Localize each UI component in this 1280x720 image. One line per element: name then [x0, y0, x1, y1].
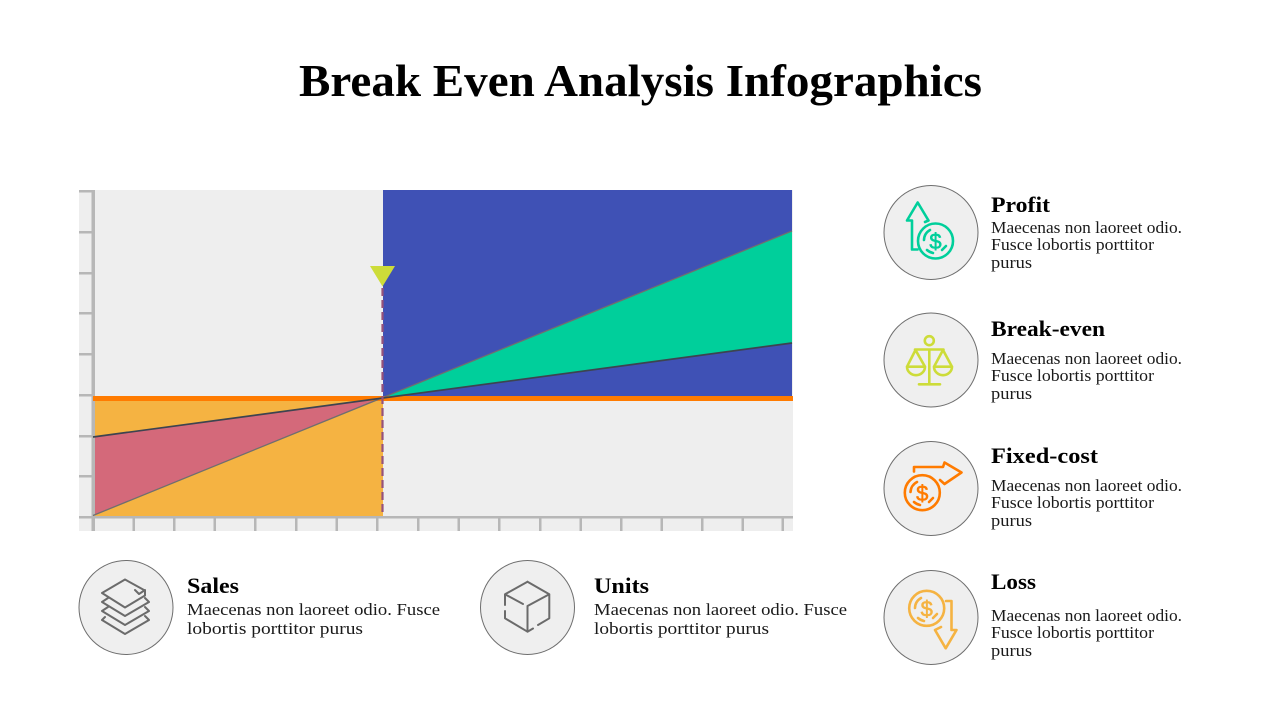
units text: Maecenas non laoreet odio. Fusce [594, 600, 847, 619]
icon: right arrow with coin [905, 462, 962, 510]
loss text: Fusce lobortis porttitor [991, 623, 1155, 642]
item: loss [884, 569, 1182, 664]
icon: scales [907, 336, 952, 384]
profit wedge [383, 231, 792, 398]
axis grid ticks [79, 190, 793, 531]
loss text: Loss [991, 569, 1036, 594]
break-even text [991, 316, 1182, 403]
loss text: purus [991, 641, 1032, 660]
profit text: Fusce lobortis porttitor [991, 235, 1155, 254]
item: profit [884, 186, 1182, 280]
break-even text: Break-even [991, 316, 1105, 341]
sales text: Sales [187, 573, 239, 598]
break-even marker [370, 266, 395, 286]
sales text: Maecenas non laoreet odio. Fusce [187, 600, 440, 619]
loss text: Maecenas non laoreet odio. [991, 606, 1182, 625]
sales text: lobortis porttitor purus [187, 619, 363, 638]
break-even text: Fusce lobortis porttitor [991, 366, 1155, 385]
loss text [991, 569, 1182, 660]
sales text [187, 573, 440, 638]
item: sales [79, 560, 440, 654]
fixed-cost text: Fixed-cost [991, 443, 1099, 468]
profit zone background [383, 190, 792, 398]
sales line [93, 231, 792, 516]
profit text: Profit [991, 192, 1051, 217]
item: break-even [884, 313, 1182, 407]
fixed cost line [93, 396, 793, 401]
icon: down arrow with coin: $ [921, 596, 933, 622]
break-even text: purus [991, 384, 1032, 403]
fixed-cost text: purus [991, 511, 1032, 530]
icon: up arrow with coin: $ [929, 229, 942, 254]
icon: down arrow with coin [909, 591, 956, 648]
icon: up arrow with coin [907, 202, 953, 258]
fixed-cost text [991, 443, 1182, 530]
loss wedge [93, 398, 383, 516]
break-even text: Maecenas non laoreet odio. [991, 349, 1182, 368]
icon: stacked layers [102, 580, 149, 634]
fixed-cost text: Fusce lobortis porttitor [991, 493, 1155, 512]
total cost line [93, 343, 792, 437]
profit text [991, 192, 1182, 272]
fixed cost area [93, 399, 383, 516]
icon: cube [505, 582, 549, 632]
units text: lobortis porttitor purus [594, 619, 769, 638]
profit text: Maecenas non laoreet odio. [991, 218, 1182, 237]
item: fixed-cost [884, 442, 1182, 536]
chart: break-even [79, 190, 793, 531]
break-even dashed line [381, 288, 384, 516]
units text: Units [594, 573, 649, 598]
icon: right arrow with coin: $ [916, 481, 928, 506]
item: units [480, 560, 847, 654]
units text [594, 573, 847, 638]
fixed-cost text: Maecenas non laoreet odio. [991, 476, 1182, 495]
profit text: purus [991, 253, 1032, 272]
title: Break Even Analysis Infographics [299, 55, 982, 106]
